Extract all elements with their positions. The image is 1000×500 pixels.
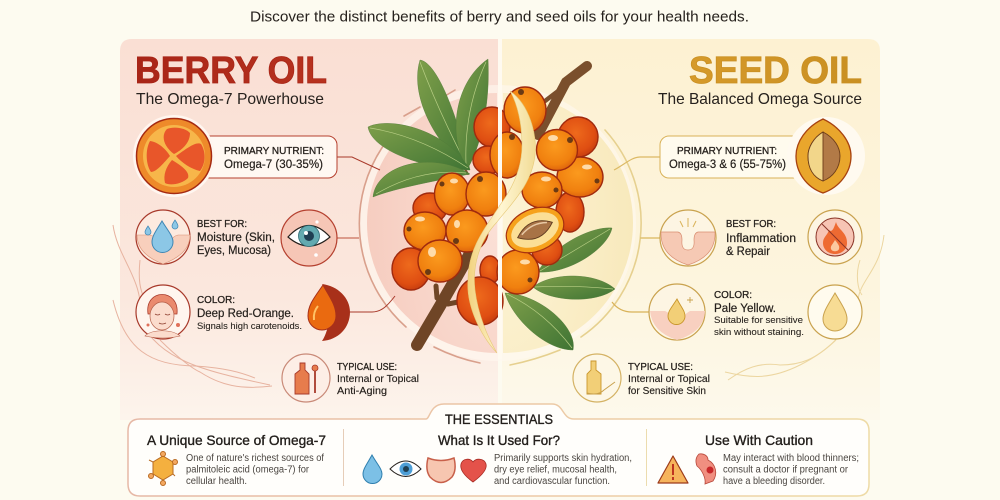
icon: yellow drop on skin [612, 284, 705, 340]
central halo: seed side [503, 93, 633, 353]
callout: primary nutrient seed [614, 136, 810, 178]
callout: primary nutrient berry [190, 136, 380, 178]
icon: warning triangle [658, 456, 688, 483]
panel: berry oil background [120, 39, 498, 420]
text: typical use berry: Internal or Topical [337, 373, 419, 385]
column: caution: have a bleeding disorder. [723, 476, 825, 487]
icon: moisture on skin [136, 210, 190, 264]
text: color berry: Signals high carotenoids. [197, 321, 302, 332]
text: best for seed: Inflammation [726, 233, 796, 245]
back berries [392, 107, 598, 325]
text: best for berry: Moisture (Skin, [197, 232, 275, 244]
essentials heading: THE ESSENTIALS [445, 411, 553, 427]
callout: primary nutrient berry: PRIMARY NUTRIENT: [224, 145, 324, 157]
icon: pregnancy [696, 454, 716, 484]
text: best for seed: & Repair [726, 246, 770, 258]
column: uses: What Is It Used For? [438, 432, 560, 448]
icon: skin repair [640, 210, 716, 266]
panel: seed oil background [502, 39, 880, 420]
text: color seed: skin without staining. [714, 327, 804, 338]
icon: reduced inflammation [808, 210, 862, 264]
berry cluster [404, 87, 603, 294]
text: color berry [197, 294, 302, 332]
ring arcs: berry side [359, 90, 480, 363]
icon: molecule [148, 451, 178, 486]
text: typical use seed: for Sensitive Skin [628, 385, 706, 397]
panel: the essentials [128, 404, 869, 496]
decorative fibres: seed side [725, 235, 884, 380]
title: seed oil: SEED OIL [689, 50, 862, 92]
text: color seed [714, 289, 804, 338]
text: color seed: COLOR: [714, 289, 752, 301]
central white ring [360, 85, 636, 361]
column: caution: Use With Caution [705, 432, 813, 448]
leaves [368, 59, 615, 350]
title: berry oil: BERRY OIL [135, 50, 327, 92]
column: uses [363, 432, 632, 487]
column: unique source: palmitoleic acid (omega-7) for [186, 464, 310, 476]
callout: primary nutrient seed: Omega-3 & 6 (55-75%) [669, 159, 786, 171]
icon: glowing face [136, 285, 190, 339]
text: typical use seed: Internal or Topical [628, 373, 710, 385]
halved seed [499, 199, 571, 261]
column: uses: Primarily supports skin hydration, [494, 453, 632, 464]
column: caution [658, 432, 859, 487]
text: color seed: Suitable for sensitive [714, 315, 803, 326]
icon: heart [461, 459, 486, 482]
column: caution: consult a doctor if pregnant or [723, 464, 849, 476]
branch [417, 66, 587, 345]
column: caution: May interact with blood thinners; [723, 453, 859, 464]
illustration: sea buckthorn branch [368, 39, 615, 359]
golden oil ribbon [468, 91, 535, 353]
icon: eye [390, 461, 421, 476]
icon: pale yellow drop [808, 285, 862, 339]
text: best for berry: BEST FOR: [197, 218, 247, 230]
icon: berry cross section [133, 115, 215, 197]
text: typical use berry: TYPICAL USE: [337, 361, 397, 373]
text: best for berry: Eyes, Mucosa) [197, 245, 271, 257]
ring arcs: seed side [510, 130, 641, 365]
callout: primary nutrient berry: Omega-7 (30-35%) [224, 159, 323, 171]
text: color berry: COLOR: [197, 294, 235, 306]
column: uses: and cardiovascular function. [494, 476, 610, 487]
icon: seed cross section [787, 117, 865, 195]
icon: water drop [363, 455, 382, 484]
intro text: Discover the distinct benefits of berry and seed oils for your health needs. [250, 8, 749, 26]
column: unique source: One of nature's richest sources of [186, 453, 324, 464]
column: uses: dry eye relief, mucosal health, [494, 464, 617, 476]
text: typical use berry: Anti-Aging [337, 385, 387, 397]
column: unique source: A Unique Source of Omega-7 [147, 432, 326, 448]
icon: eye [281, 210, 359, 266]
column: unique source [147, 432, 326, 487]
subtitle: berry oil: The Omega-7 Powerhouse [136, 91, 324, 108]
text: typical use berry [337, 361, 419, 397]
callout: primary nutrient seed: PRIMARY NUTRIENT: [677, 145, 777, 157]
text: typical use seed [628, 361, 710, 397]
text: best for berry [197, 218, 275, 257]
text: color berry: Deep Red-Orange. [197, 308, 294, 320]
icon: bottle and dropper [282, 354, 330, 402]
column: unique source: cellular health. [186, 476, 247, 487]
text: typical use seed: TYPICAL USE: [628, 361, 693, 373]
decorative fibres: berry side [113, 225, 272, 387]
icon: mucosa [427, 458, 455, 482]
icon: deep red-orange oil drop [308, 284, 395, 341]
text: best for seed [726, 218, 796, 258]
icon: dropper bottle and hand [573, 354, 621, 402]
text: best for seed: BEST FOR: [726, 218, 776, 230]
subtitle: seed oil: The Balanced Omega Source [658, 91, 862, 108]
centre divider [498, 39, 502, 359]
text: color seed: Pale Yellow. [714, 303, 776, 315]
central halo: berry side [367, 93, 497, 353]
